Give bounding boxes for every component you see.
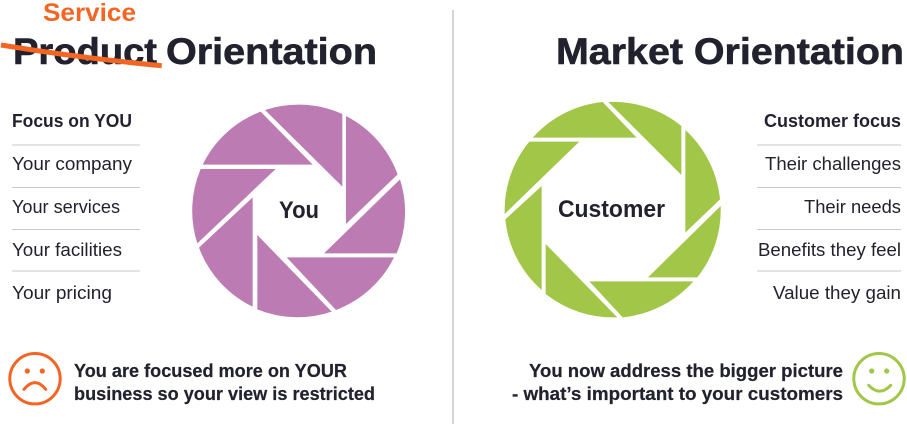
list: focus on you (12, 111, 140, 303)
list: focus on you: Your facilities (12, 240, 122, 260)
list: customer focus: Customer focus (764, 111, 901, 131)
callout: bigger picture (512, 361, 843, 404)
list: customer focus (757, 111, 901, 303)
list: customer focus: Benefits they feel (758, 240, 901, 260)
strikethrough (1, 45, 162, 66)
heading: market orientation: Market Orientation (556, 31, 904, 72)
chart: purple aperture (192, 105, 405, 317)
callout: restricted view: You are focused more on YOUR (74, 361, 347, 381)
list: focus on you: Focus on YOU (12, 111, 132, 131)
heading: product orientation (1, 0, 377, 72)
chart: green aperture (505, 102, 721, 317)
list: customer focus: Value they gain (773, 283, 901, 303)
label: Customer: Customer (558, 196, 665, 223)
list: customer focus: Their needs (804, 197, 901, 217)
list: customer focus: Their challenges (765, 154, 901, 174)
label: You: You (279, 197, 319, 224)
callout: restricted view (74, 361, 375, 404)
list: focus on you: Your company (12, 154, 132, 174)
callout: bigger picture: - what’s important to your customers (512, 384, 843, 404)
icon: sad face (10, 354, 60, 404)
list: focus on you: Your pricing (12, 283, 112, 303)
callout: bigger picture: You now address the bigger picture (529, 361, 843, 381)
heading word: Product: Product (13, 31, 157, 72)
list: focus on you: Your services (12, 197, 120, 217)
icon: happy face (854, 354, 904, 404)
callout: restricted view: business so your view is restricted (74, 384, 375, 404)
heading word: Orientation: Orientation (166, 31, 377, 72)
